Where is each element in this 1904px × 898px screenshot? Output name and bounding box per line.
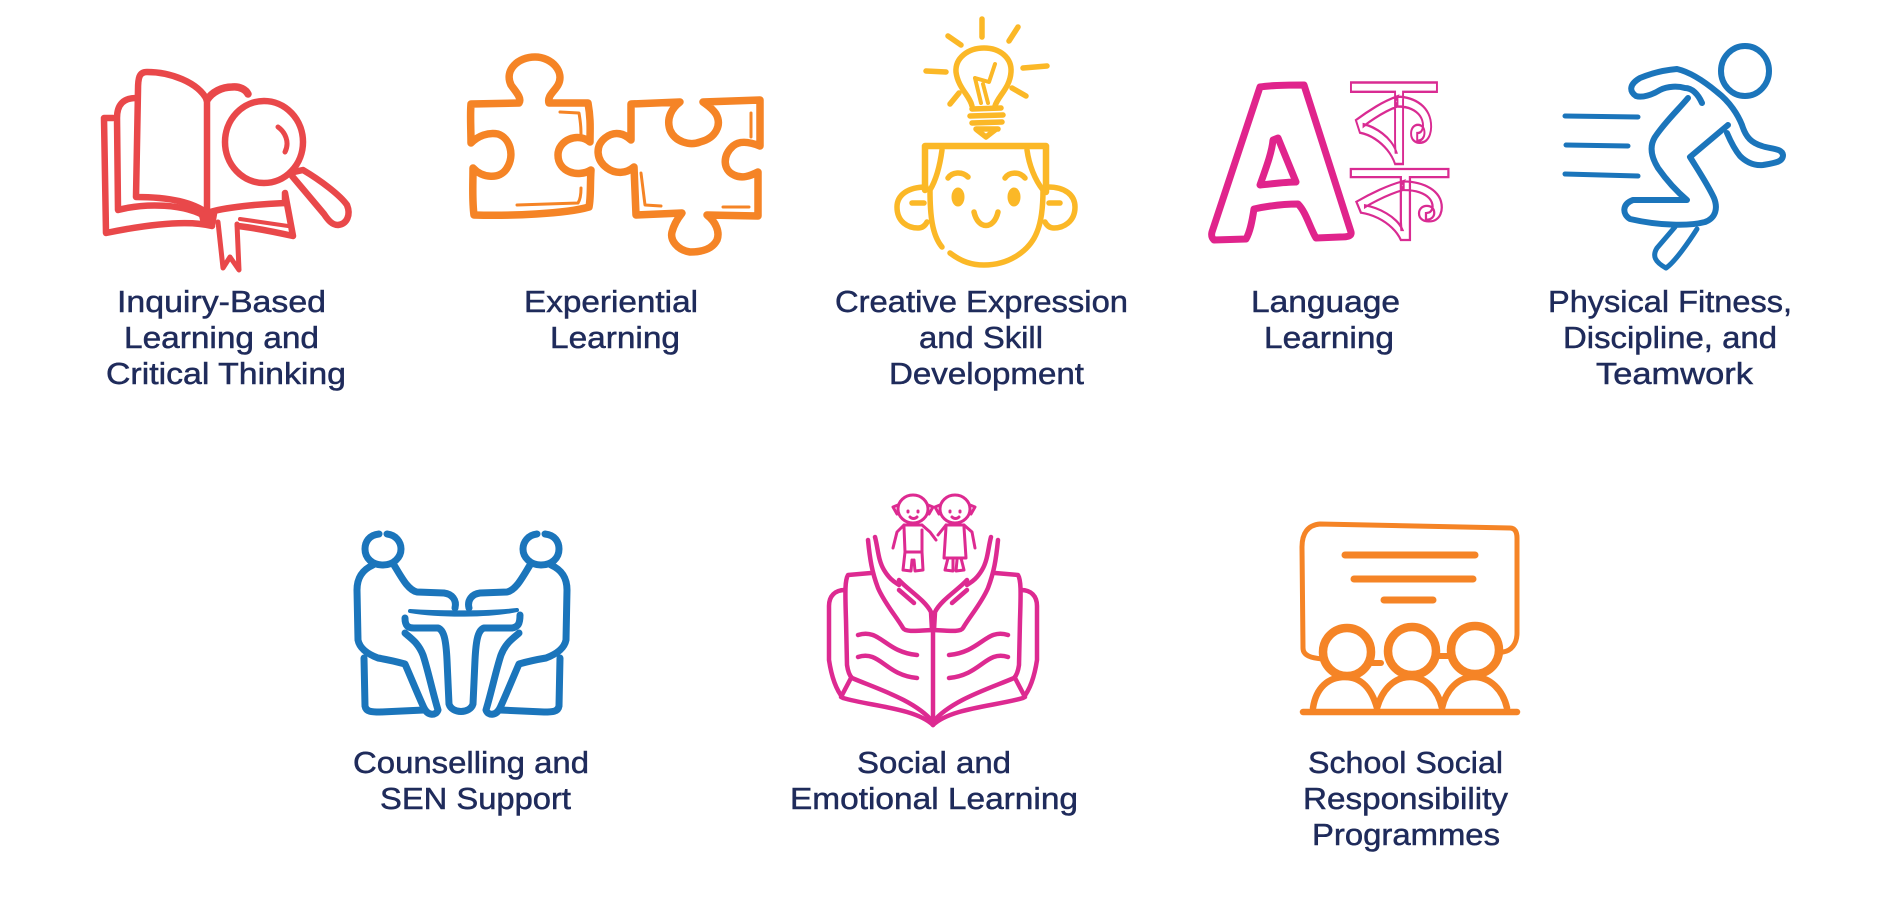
label: Inquiry-Based Learning and Critical Thinking xyxy=(106,285,346,391)
label: Creative Expression and Skill Development: and Skill xyxy=(919,321,1043,355)
icon: presentation board with audience xyxy=(1302,524,1517,712)
left person xyxy=(357,534,455,714)
icon: book with hands holding two children xyxy=(829,495,1037,725)
icon: two people at a counselling table xyxy=(357,534,567,714)
label: Social and Emotional Learning: Emotional Learning xyxy=(790,782,1078,816)
left half of book and hand xyxy=(829,537,933,725)
label: Counselling and SEN Support: Counselling and xyxy=(353,746,589,780)
right child xyxy=(935,495,975,571)
letter A xyxy=(1212,85,1351,240)
label: School Social Responsibility Programmes: Responsibility xyxy=(1303,782,1509,816)
label: Counselling and SEN Support xyxy=(353,746,589,816)
label: Experiential Learning xyxy=(524,285,698,355)
label: School Social Responsibility Programmes: School Social xyxy=(1308,746,1503,780)
label: Physical Fitness, Discipline, and Teamwork: Teamwork xyxy=(1596,357,1754,391)
label: Inquiry-Based Learning and Critical Thinking: Critical Thinking xyxy=(106,357,346,391)
label: Experiential Learning: Learning xyxy=(550,321,680,355)
icon: letter A with Bengali letters xyxy=(1212,45,1449,287)
table xyxy=(410,610,517,615)
label: Social and Emotional Learning xyxy=(790,746,1078,816)
label: Language Learning: Language xyxy=(1251,285,1400,319)
label: Creative Expression and Skill Development: Creative Expression xyxy=(835,285,1128,319)
icon: open book with magnifying glass xyxy=(104,72,349,270)
label: Physical Fitness, Discipline, and Teamwork: Physical Fitness, xyxy=(1548,285,1792,319)
label: Inquiry-Based Learning and Critical Thinking: Learning and xyxy=(124,321,319,355)
label: Creative Expression and Skill Development xyxy=(835,285,1128,391)
label: Language Learning: Learning xyxy=(1264,321,1394,355)
label: Inquiry-Based Learning and Critical Thinking: Inquiry-Based xyxy=(117,285,326,319)
label: School Social Responsibility Programmes xyxy=(1303,746,1509,852)
Bengali letter ka, top: ক xyxy=(1350,45,1437,218)
icon: running figure with speed lines xyxy=(1565,46,1783,268)
Bengali letter ka, bottom: ক xyxy=(1350,137,1449,287)
left child xyxy=(893,495,936,571)
label: Social and Emotional Learning: Social and xyxy=(857,746,1011,780)
label: Physical Fitness, Discipline, and Teamwork: Discipline, and xyxy=(1563,321,1777,355)
right half of book and hand xyxy=(933,537,1037,725)
label: School Social Responsibility Programmes: Programmes xyxy=(1312,818,1500,852)
label: Physical Fitness, Discipline, and Teamwork xyxy=(1548,285,1792,391)
icon: two puzzle pieces xyxy=(471,57,760,252)
icon: head with light bulb xyxy=(897,19,1075,265)
label: Creative Expression and Skill Development: Development xyxy=(889,357,1085,391)
label: Experiential Learning: Experiential xyxy=(524,285,698,319)
right person xyxy=(469,534,567,714)
label: Language Learning xyxy=(1251,285,1400,355)
label: Counselling and SEN Support: SEN Support xyxy=(380,782,572,816)
